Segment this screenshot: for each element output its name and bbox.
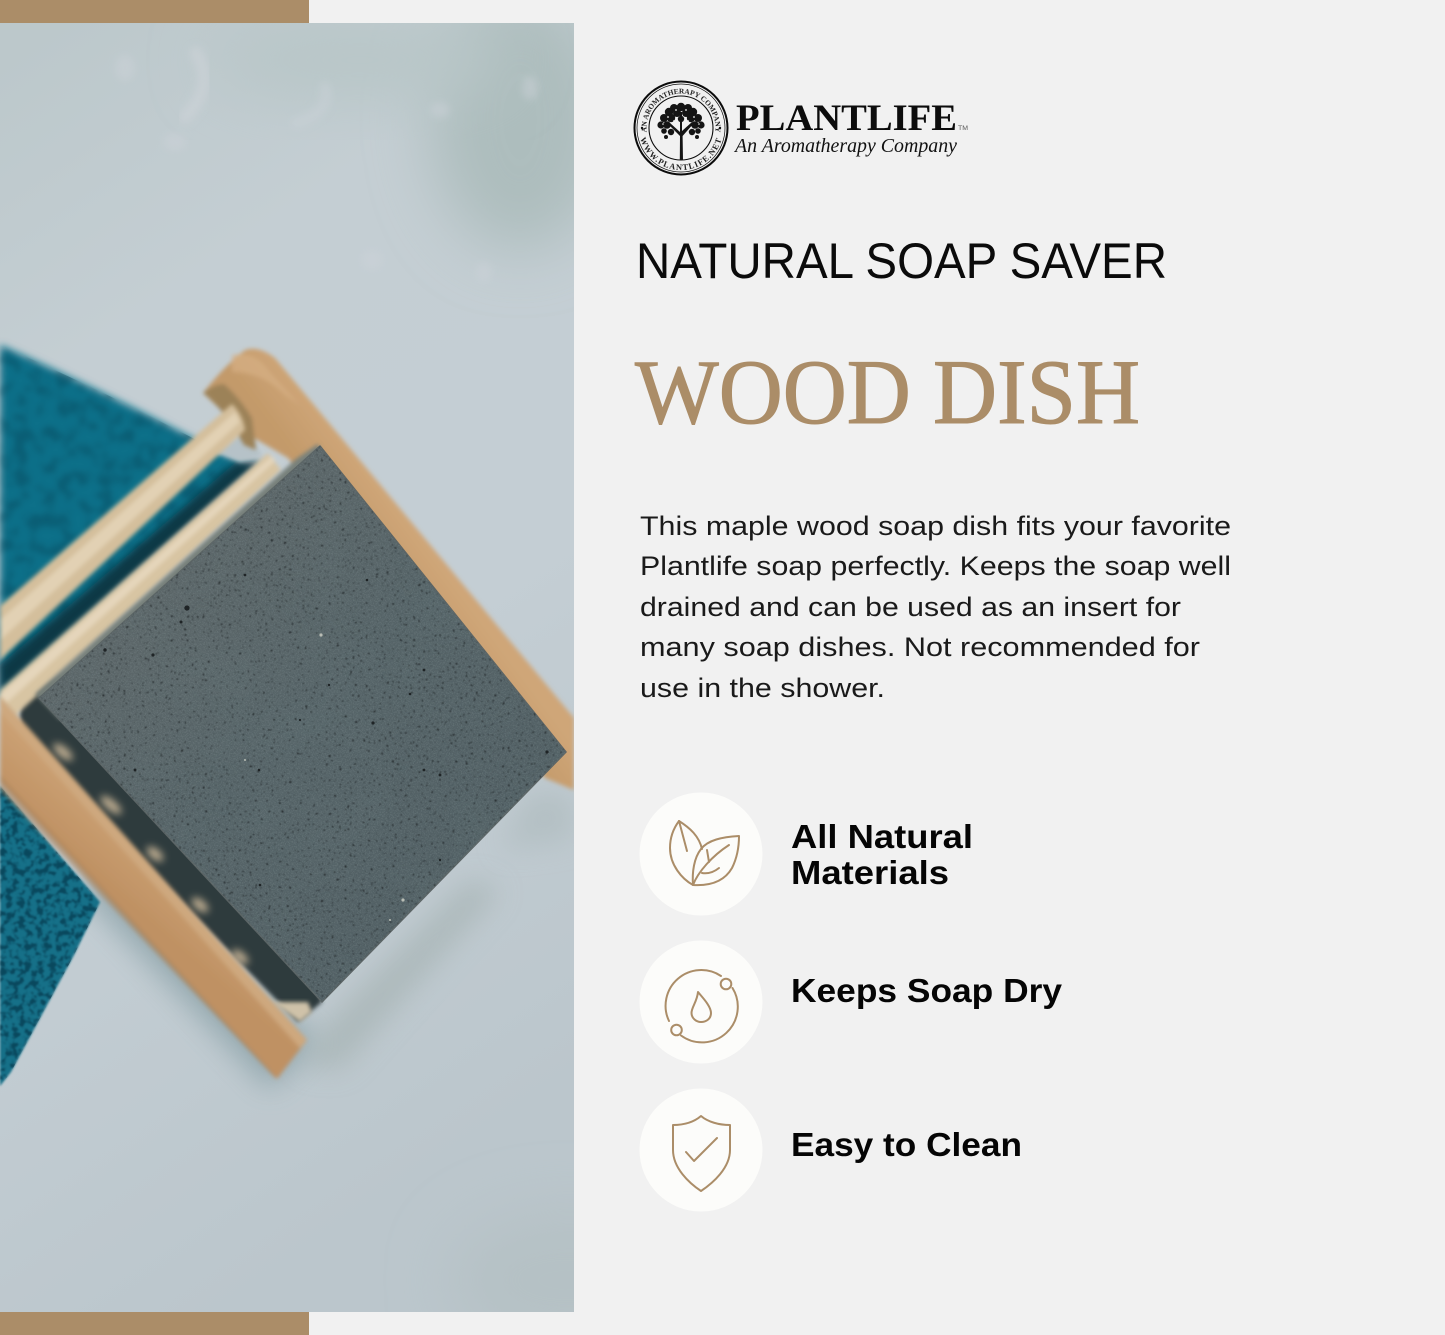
logo seal: AN AROMATHERAPY COMPANY — [642, 88, 720, 132]
bottom accent bar — [0, 1312, 309, 1335]
teal towel — [0, 340, 262, 1090]
description text: drained and can be used as an insert for — [640, 592, 1181, 622]
soap bar — [30, 440, 570, 1010]
brand logo: TM — [958, 126, 968, 132]
logo seal — [634, 80, 728, 176]
feature: easy to clean — [640, 1088, 1022, 1212]
icon: shield with check — [640, 1088, 762, 1212]
description text: Plantlife soap perfectly. Keeps the soap well — [640, 551, 1231, 581]
feature: keeps soap dry — [640, 940, 1063, 1064]
wood rail: far side — [203, 349, 574, 790]
logo wordmark: PLANTLIFE — [736, 98, 957, 139]
feature label: Easy to Clean — [791, 1126, 1022, 1163]
icon: leaves — [640, 792, 762, 916]
feature label: Keeps Soap Dry — [791, 972, 1063, 1009]
feature label: Materials — [791, 854, 949, 891]
feature label — [791, 818, 973, 891]
dish shadow and far dowels beneath soap — [18, 680, 325, 1024]
brand logo — [634, 80, 968, 176]
icon: water drop in orbit — [640, 940, 762, 1064]
logo tagline: An Aromatherapy Company — [733, 135, 957, 157]
top accent bar — [0, 0, 309, 23]
wood dowels — [0, 404, 281, 716]
description text: This maple wood soap dish fits your favorite — [640, 511, 1231, 541]
description text: many soap dishes. Not recommended for — [640, 632, 1200, 662]
heading: wood dish: WOOD DISH — [635, 341, 1140, 443]
feature label: All Natural — [791, 818, 973, 855]
heading: natural soap saver: NATURAL SOAP SAVER — [636, 233, 1167, 289]
description text: use in the shower. — [640, 673, 885, 703]
logo seal: WWW.PLANTLIFE.NET — [640, 136, 722, 170]
feature: all natural materials — [640, 792, 973, 916]
shadow beneath dish — [70, 790, 574, 1090]
tree — [657, 103, 705, 160]
description text — [640, 511, 1231, 703]
photo: soap on wood dish — [0, 23, 574, 1312]
wood rail: near side — [0, 696, 307, 1079]
